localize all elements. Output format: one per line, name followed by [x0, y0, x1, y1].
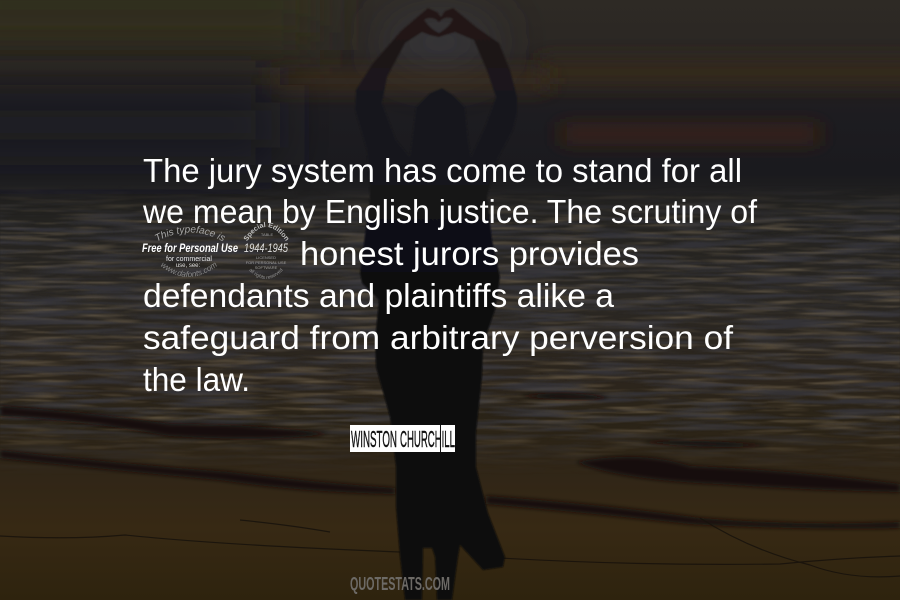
watermark: free font notice replacing the number: LICENSED: [256, 255, 276, 260]
line 2: we mean by English justice. The scrutiny of: [142, 193, 758, 230]
watermark: free font notice replacing the number: all rights reserved: [249, 268, 283, 279]
watermark: free font notice replacing the number: Free for Personal Use: [142, 241, 238, 255]
sand cracks: [0, 518, 900, 577]
line 6: the law.: [143, 361, 250, 398]
line 3: honest jurors provides: [300, 235, 639, 272]
site credit: QUOTESTATS.COM: [350, 574, 450, 594]
line 4: defendants and plaintiffs alike a: [143, 277, 615, 314]
watermark: free font notice replacing the number: 1944-1945: [244, 241, 288, 255]
silhouette: woman making a heart with her hands: [355, 8, 517, 600]
watermark: free font notice replacing the number: FOR PERSONAL USE: [246, 260, 287, 265]
line 5: safeguard from arbitrary perversion of: [143, 319, 734, 356]
watermark: free font notice replacing the number: Special Edition: [244, 222, 288, 241]
author label: WINSTON: [351, 426, 397, 452]
watermark: free font notice replacing the number: use, see:: [176, 263, 201, 269]
sky glow and clouds: [0, 0, 900, 165]
line 1: The jury system has come to stand for all: [143, 152, 742, 189]
watermark: free font notice replacing the number: [142, 222, 288, 279]
dark wave bands on the shore: [0, 393, 900, 528]
sea ripples: [0, 185, 900, 475]
quote text: [142, 152, 758, 398]
watermark: free font notice replacing the number: for commercial: [166, 256, 212, 263]
watermark: free font notice replacing the number: SOFTWARE: [255, 265, 278, 270]
watermark: free font notice replacing the number: This typeface is: [154, 226, 225, 241]
text: CHURCHILL: [400, 426, 455, 452]
watermark: free font notice replacing the number: TABLE: [261, 232, 274, 237]
watermark: free font notice replacing the number: www.dafonts.com: [161, 262, 217, 277]
